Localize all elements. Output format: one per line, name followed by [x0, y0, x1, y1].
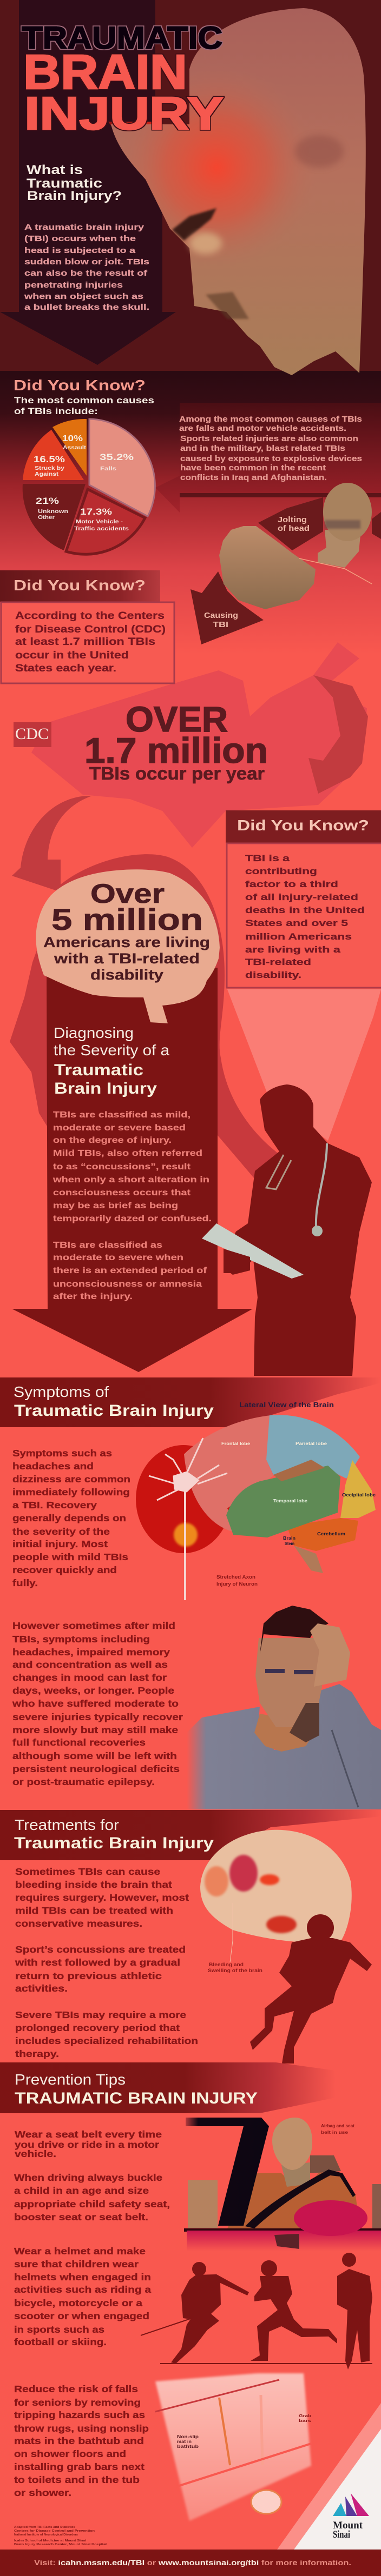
text block: symptoms: fully. [12, 1577, 38, 1588]
illustration: bleeding brain: Bleeding and [209, 1962, 244, 1967]
frontal lobe [184, 1415, 273, 1533]
text block: treatments [15, 1866, 198, 2059]
title: BRAIN [23, 45, 187, 99]
red wedge behind head [108, 122, 168, 216]
dash line [184, 2228, 381, 2232]
title [22, 21, 224, 139]
illustration: lateral view of the brain: Temporal lobe [273, 1499, 308, 1503]
panel: CDC statistic: According to the Centers [15, 610, 165, 622]
heading: what is TBI: Brain Injury? [27, 189, 122, 203]
illustration: driver with seat belt and airbag [184, 2118, 381, 2251]
dashboard gradient [187, 2231, 381, 2251]
pie chart: causes of TBI: Traffic accidents [74, 526, 129, 532]
hand on jaw shadow [290, 1703, 319, 1742]
text block: treatments: includes specialized rehabilitation [15, 2035, 198, 2046]
panel: one third of deaths: disability. [245, 970, 301, 980]
text block: definition: can also be the result of [24, 269, 148, 278]
panel: one third of deaths: TBI is a [245, 853, 290, 863]
logo: CDC [14, 722, 51, 747]
head silhouette [10, 854, 279, 1179]
pie chart: causes of TBI: Other [38, 515, 55, 521]
text block: treatments: therapy. [15, 2048, 59, 2059]
pie chart: causes of TBI: 21% [36, 496, 59, 506]
illustration: jolting head: Causing [204, 611, 238, 620]
panel: what is TBI [0, 0, 176, 365]
neck [254, 1714, 319, 1752]
pie chart: causes of TBI: Motor Vehicle - [76, 519, 123, 525]
head [272, 2118, 312, 2170]
heading band: prevention: TRAUMATIC BRAIN INJURY [15, 2089, 258, 2107]
labels: 10% [62, 434, 83, 443]
text block: prevention tips: installing grab bars next [14, 2461, 144, 2472]
light beam [227, 989, 381, 1141]
arm fold shadow [332, 1730, 358, 1807]
boundary patch [273, 1460, 325, 1481]
arrow: causing TBI [190, 571, 264, 644]
illustration: doctor silhouette [202, 1084, 372, 1376]
slice: struck by [23, 430, 84, 480]
text block: common causes: caused by exposure to explosive devices [180, 454, 362, 463]
heading band: did you know 3 [226, 810, 381, 843]
illustration: lateral view of the brain: Injury of Neuron [216, 1581, 258, 1587]
illustration: brain with statistic: Americans are living [43, 934, 210, 950]
text block: prevention tips: Wear a seat belt every time [15, 2129, 162, 2140]
text block: sources: Brain Injury Research Center, Mount Sinai Hospital [14, 2543, 107, 2546]
shirt [187, 1684, 381, 1809]
footer: Visit: icahn.mssm.edu/TBI or www.mountsinai.org/tbi for more information. [34, 2558, 351, 2567]
text block: sources: Icahn School of Medicine at Mount Sinai [14, 2539, 87, 2542]
pointer line [230, 1903, 233, 1962]
eyes [265, 1669, 313, 1674]
neuron body [149, 1438, 227, 1600]
heading band: treatments: Traumatic Brain Injury [14, 1834, 214, 1852]
text block: prevention tips: for seniors by removing [14, 2397, 141, 2408]
text block: prevention tips: tripping hazards such as [14, 2409, 145, 2420]
text block: prevention tips: When driving always buckle [14, 2172, 162, 2183]
torso [227, 2172, 360, 2228]
illustration: driver with seat belt and airbag: belt in use [321, 2130, 349, 2135]
statistic: over 1.7 million: TBIs occur per year [89, 763, 265, 783]
panel: CDC statistic: for Disease Control (CDC) [15, 624, 166, 635]
text block: treatments: prolonged recovery period that [15, 2022, 180, 2033]
text block: symptoms: recover quickly and [12, 1565, 117, 1575]
temporal lobe [226, 1466, 340, 1537]
grab rail [155, 2380, 279, 2412]
stethoscope tube [316, 1143, 327, 1227]
text block: treatments: activities. [15, 1983, 68, 1994]
title: TRAUMATIC [22, 21, 222, 56]
illustration: brain with statistic: with a TBI-related [54, 950, 200, 967]
neuron background [136, 1445, 231, 1553]
illustration: lateral view of the brain: Occipital lobe [342, 1493, 376, 1497]
text block: classification: Mild TBIs, also often referred [53, 1149, 202, 1158]
logo: Mount Sinai: Sinai [333, 2529, 350, 2540]
heading: diagnosing severity: Traumatic [54, 1061, 143, 1079]
text block: prevention tips: Wear a helmet and make [14, 2246, 146, 2257]
arrow tip right [372, 512, 381, 539]
text block: lasting symptoms: who have suffered moderate to [12, 1698, 179, 1709]
statistic: over 1.7 million: OVER [126, 699, 228, 739]
pie chart: causes of TBI: Against [35, 471, 59, 477]
labels: Non-slip [177, 2434, 199, 2439]
statistic: over 1.7 million: 1.7 million [84, 730, 268, 770]
illustration: bleeding brain: Swelling of the brain [208, 1968, 262, 1973]
text block: treatments: Severe TBIs may require a more [15, 2009, 186, 2020]
text block: common causes: have been common in the recent [180, 463, 326, 472]
text block: lasting symptoms: and concentration as well as [12, 1659, 168, 1670]
panel: one third of deaths: factor to a third [245, 879, 338, 889]
illustration: lateral view of the brain: Stem [285, 1541, 294, 1546]
eye and brow shadow [172, 208, 216, 241]
text block: prevention tips: in sports such as [14, 2324, 104, 2335]
text block: prevention tips: vehicle. [15, 2148, 56, 2159]
arrow: east coast curve [308, 675, 368, 794]
text block: treatments: Sometimes TBIs can cause [15, 1866, 160, 1877]
text block: prevention tips: you drive or ride in a motor [15, 2139, 159, 2150]
section background: gradient transition [0, 371, 381, 657]
panel: CDC statistic [1, 602, 174, 683]
logo: CDC: CDC [15, 725, 49, 743]
heading band: treatments: Treatments for [15, 1816, 119, 1833]
illustration: bathroom [155, 2373, 311, 2521]
text block: classification: on the degree of injury. [53, 1136, 172, 1145]
text block: definition: a bullet breaks the skull. [24, 303, 149, 312]
illustration: lateral view of the brain: Stretched Axon [216, 1574, 255, 1580]
slice: falls [89, 419, 155, 516]
text block: prevention tips: on shower floors and [14, 2448, 126, 2459]
panel: one third of deaths: of all injury-related [245, 892, 358, 902]
towel bars [219, 2398, 230, 2465]
illustration: jolting head [190, 483, 381, 644]
heading: diagnosing severity: the Severity of a [54, 1042, 169, 1059]
labels: Frontal lobe [221, 1441, 251, 1446]
text block: classification [52, 1110, 212, 1301]
text block: prevention tips [14, 2129, 170, 2498]
heading band: prevention: Prevention Tips [15, 2071, 126, 2088]
text block: classification: when only a short alteration in [52, 1175, 209, 1184]
caption: Airbag and seat [321, 2124, 354, 2128]
text block: definition: (TBI) occurs when the [24, 234, 136, 243]
axon injury glow [174, 1523, 198, 1547]
text block: prevention tips: scooter or when engaged [14, 2311, 149, 2321]
map of the United States [31, 642, 367, 848]
slice: motor vehicle [66, 489, 145, 554]
face [255, 1638, 322, 1727]
illustration: brain with statistic [36, 869, 220, 1023]
text block: prevention tips: sure that children wear [14, 2259, 139, 2269]
illustration: brain with statistic: Over [90, 878, 165, 909]
text block: symptoms: initial injury. Most [12, 1539, 108, 1549]
mouth shadow [206, 292, 249, 319]
corner: white triangle [294, 2429, 381, 2550]
text block: symptoms: the severity of the [12, 1526, 110, 1537]
heading band: symptoms [0, 1377, 381, 1427]
parietal lobe [266, 1415, 360, 1479]
text block: common causes [179, 415, 362, 482]
hand [224, 1249, 250, 1275]
text block: lasting symptoms: although some will be left with [12, 1750, 177, 1761]
text block: common causes: are falls and motor vehicle accidents. [179, 424, 346, 433]
arrow: curl around head [12, 796, 92, 892]
illustration: football player [250, 1914, 372, 2064]
text block: treatments: Sport’s concussions are treated [15, 1944, 186, 1955]
illustration: bathroom: bars [299, 2419, 311, 2423]
text block: classification: after the injury. [53, 1292, 133, 1301]
cheek and jaw shading [189, 232, 222, 254]
slice: unknown [23, 484, 86, 550]
passenger behind [188, 2180, 218, 2228]
illustration: lateral view of the brain: Parietal lobe [295, 1441, 327, 1446]
illustration: lateral view of the brain [136, 1401, 376, 1600]
text block: treatments: with rest followed by a gradual [15, 1957, 180, 1968]
pie chart: causes of TBI: 16.5% [34, 454, 65, 464]
heading: what is TBI: What is [27, 163, 83, 177]
panel: one third of deaths [227, 843, 381, 988]
slice: assault [52, 419, 87, 476]
windshield frame [186, 2118, 269, 2226]
illustration: bathroom: Grab [299, 2414, 311, 2418]
text block: prevention tips: or shower. [14, 2487, 71, 2498]
text block: classification: consciousness occurs that [53, 1188, 191, 1197]
panel: one third of deaths: million Americans [245, 931, 352, 942]
axon line [184, 1522, 186, 1600]
text block: classification: TBIs are classified as [53, 1241, 162, 1250]
heading: what is TBI: Traumatic [27, 176, 102, 191]
heading: diagnosing severity: Brain Injury [54, 1080, 157, 1097]
drain [251, 2490, 281, 2514]
occipital lobe [340, 1460, 376, 1518]
airbag [294, 2200, 367, 2236]
stethoscope chest piece [312, 1226, 323, 1236]
text block: classification: TBIs are classified as mild, [53, 1110, 190, 1120]
heading: did you know 1: of TBIs include: [14, 406, 98, 416]
illustration: bathroom: mat in [177, 2439, 192, 2444]
text block: symptoms: headaches and [12, 1461, 94, 1472]
text block: treatments: requires surgery. However, most [15, 1892, 189, 1903]
pie chart: causes of TBI: 17.3% [80, 507, 112, 517]
statistic: over 1.7 million [84, 699, 268, 783]
text block: lasting symptoms: headaches, impaired memory [12, 1647, 170, 1658]
photo: man with headache [187, 1606, 381, 1809]
text block: common causes: and in the military, blast related TBIs [180, 444, 345, 453]
text block: definition [24, 223, 149, 312]
illustration: lateral view of the brain: Cerebellum [317, 1532, 345, 1536]
text block: common causes: Sports related injuries are also common [180, 434, 358, 443]
heading: diagnosing severity: Diagnosing [54, 1024, 134, 1041]
panel: CDC statistic: States each year. [15, 663, 116, 674]
text block: prevention tips: appropriate child safety seat, [14, 2199, 170, 2209]
pie chart: causes of TBI: Unknown [38, 509, 68, 515]
text block: lasting symptoms: or post-traumatic epilepsy. [12, 1776, 155, 1787]
illustration: lateral view of the brain: Lateral View of the Brain [239, 1401, 334, 1409]
illustration: brain with statistic: disability [90, 967, 163, 983]
title: INJURY [24, 88, 224, 139]
heading: did you know 1: The most common causes [14, 395, 154, 405]
text block: lasting symptoms: TBIs, symptoms including [12, 1634, 150, 1645]
footer [0, 2550, 381, 2576]
ear hint [295, 135, 344, 168]
text block: definition: when an object such as [24, 292, 143, 301]
arrow: jolting of head [258, 497, 323, 550]
tub edge [176, 2444, 311, 2487]
upper neck [318, 530, 361, 568]
illustration: jolting head: TBI [213, 620, 228, 629]
heading band: treatments [0, 1810, 381, 1860]
text block: prevention tips: a child in an age and size [14, 2185, 149, 2196]
text block: symptoms: immediately following [12, 1487, 130, 1497]
text block: prevention tips: activities such as riding a [14, 2284, 151, 2295]
illustration: jolting head: of head [278, 524, 310, 533]
text block: sources [14, 2526, 107, 2546]
text block: definition: sudden blow or jolt. TBIs [24, 257, 149, 267]
runner [251, 2260, 337, 2361]
labels: Jolting [278, 515, 307, 524]
panel: CDC statistic: at least 1.7 million TBIs [15, 636, 155, 648]
panel: diagnosing severity arrow [12, 968, 253, 1372]
text block: sources: Adapted from TBI Facts and Statistics [14, 2526, 75, 2529]
text block: prevention tips: to toilets and in the tub [14, 2474, 140, 2485]
heading band: did you know 2 [0, 570, 160, 602]
logo: Mount Sinai [333, 2493, 369, 2540]
heading band: symptoms: Symptoms of [14, 1383, 109, 1400]
stethoscope ear tubes [266, 1155, 291, 1189]
text block: treatments: return to previous athletic [15, 1971, 162, 1981]
corner: pink stripe [277, 2403, 381, 2550]
panel: one third of deaths: contributing [245, 866, 317, 876]
cyclist [337, 2253, 372, 2369]
illustration: sports silhouettes [141, 2253, 372, 2369]
text block: treatments: conservative measures. [15, 1918, 142, 1929]
upper head [323, 483, 372, 541]
text block: classification: may be as brief as being [53, 1201, 178, 1210]
seat belt [245, 2169, 356, 2228]
text block: symptoms: people with mild TBIs [12, 1552, 128, 1562]
text block: prevention tips: football or skiing. [14, 2337, 107, 2347]
text block: lasting symptoms: severe injuries typically recover [12, 1712, 183, 1722]
panel: one third of deaths: deaths in the United [245, 905, 365, 915]
heading band: did you know 3: Did You Know? [237, 817, 369, 834]
text block: treatments: mild TBIs can be treated with [15, 1905, 173, 1916]
panel bottom rule [180, 493, 381, 497]
heading: did you know 1: Did You Know? [14, 377, 146, 394]
text block: common causes: Among the most common causes of TBIs [179, 415, 362, 424]
illustration: bathroom: bathtub [177, 2444, 199, 2449]
clipboard [202, 1223, 304, 1279]
text block: treatments: bleeding inside the brain that [15, 1879, 172, 1890]
panel: one third of deaths: are living with a [245, 944, 341, 955]
panel: one third of deaths: TBI-related [245, 957, 311, 967]
panel: common causes text background [155, 403, 381, 512]
text block: lasting symptoms: changes in mood can last for [12, 1672, 167, 1683]
illustration: brain with statistic: 5 million [51, 902, 203, 936]
text block: definition: head is subjected to a [24, 246, 136, 255]
text block: symptoms: dizziness are common [12, 1474, 130, 1485]
neck [281, 2162, 310, 2187]
text block: prevention tips: Reduce the risk of falls [14, 2384, 138, 2394]
text block: sources: National Institute of Neurological Disorders [14, 2533, 78, 2537]
text block: lasting symptoms: However sometimes after mild [12, 1620, 175, 1631]
logo: Mount Sinai: Mount [333, 2520, 363, 2531]
section background: title area [0, 0, 381, 373]
text block: sources: Centers for Disease Control and Prevention [14, 2530, 95, 2533]
text block: common causes: conflicts in Iraq and Afghanistan. [180, 473, 327, 482]
heading band: symptoms: Traumatic Brain Injury [14, 1402, 214, 1420]
ground line [160, 2363, 372, 2364]
pie chart: causes of TBI: Assault [63, 445, 87, 451]
text block: classification: there is an extended period of [53, 1266, 207, 1275]
shoulder line [299, 558, 372, 584]
text block: classification: moderate to severe when [53, 1253, 183, 1262]
heading: what is TBI [27, 163, 122, 203]
cerebellum [287, 1518, 358, 1551]
shoulder shadow [310, 2155, 341, 2173]
illustration: bleeding brain [200, 1830, 352, 1973]
text block: lasting symptoms: more slowly but may still make [12, 1725, 178, 1735]
hand [310, 1623, 350, 1687]
pie chart: causes of TBI [23, 419, 155, 554]
heading band: prevention [0, 2062, 336, 2113]
text block: prevention tips: bicycle, motorcycle or a [14, 2298, 142, 2308]
text block: symptoms: a TBI. Recovery [12, 1500, 97, 1510]
text block: symptoms [12, 1448, 130, 1588]
bleeding spots [229, 1855, 258, 1892]
panel: CDC statistic: occur in the United [15, 650, 129, 661]
text block: lasting symptoms: days, weeks, or longer. People [12, 1685, 174, 1696]
lower head [219, 526, 316, 609]
text block: classification: unconsciousness or amnesia [53, 1280, 202, 1289]
skier [141, 2262, 249, 2364]
pie chart: causes of TBI: Struck by [35, 465, 65, 471]
brain stem [294, 1546, 323, 1573]
text block: classification: moderate or severe based [53, 1123, 186, 1133]
heading: did you know 1 [14, 377, 154, 416]
text block: symptoms: Symptoms such as [12, 1448, 112, 1459]
pie chart: causes of TBI: Falls [100, 466, 117, 472]
panel: one third of deaths: States and over 5 [245, 918, 348, 928]
pie chart: causes of TBI: 35.2% [100, 452, 134, 462]
text block: prevention tips: mats in the bathtub and [14, 2435, 144, 2446]
text block: classification: temporarily dazed or confused. [53, 1214, 212, 1223]
hair [260, 1606, 329, 1654]
second seat right [372, 2184, 381, 2230]
text block: prevention tips: booster seat or seat belt. [14, 2212, 148, 2222]
text block: lasting symptoms [12, 1620, 183, 1787]
text block: lasting symptoms: full functional recoveries [12, 1737, 146, 1748]
head photo [111, 8, 366, 375]
upper head shadow [325, 520, 360, 529]
text block: definition: A traumatic brain injury [24, 223, 144, 232]
text block: symptoms: generally depends on [12, 1513, 126, 1523]
heading: diagnosing severity [54, 1024, 169, 1097]
illustration: lateral view of the brain: Brain [283, 1536, 295, 1541]
steering hub [274, 2234, 299, 2249]
text block: classification: to as “concussions”, result [53, 1162, 191, 1171]
text block: lasting symptoms: persistent neurological deficits [12, 1763, 180, 1774]
heading band: did you know 2: Did You Know? [14, 577, 146, 594]
text block: prevention tips: helmets when engaged in [14, 2272, 151, 2282]
text block: prevention tips: throw rugs, using nonslip [14, 2423, 149, 2434]
text block: definition: penetrating injuries [24, 281, 123, 290]
